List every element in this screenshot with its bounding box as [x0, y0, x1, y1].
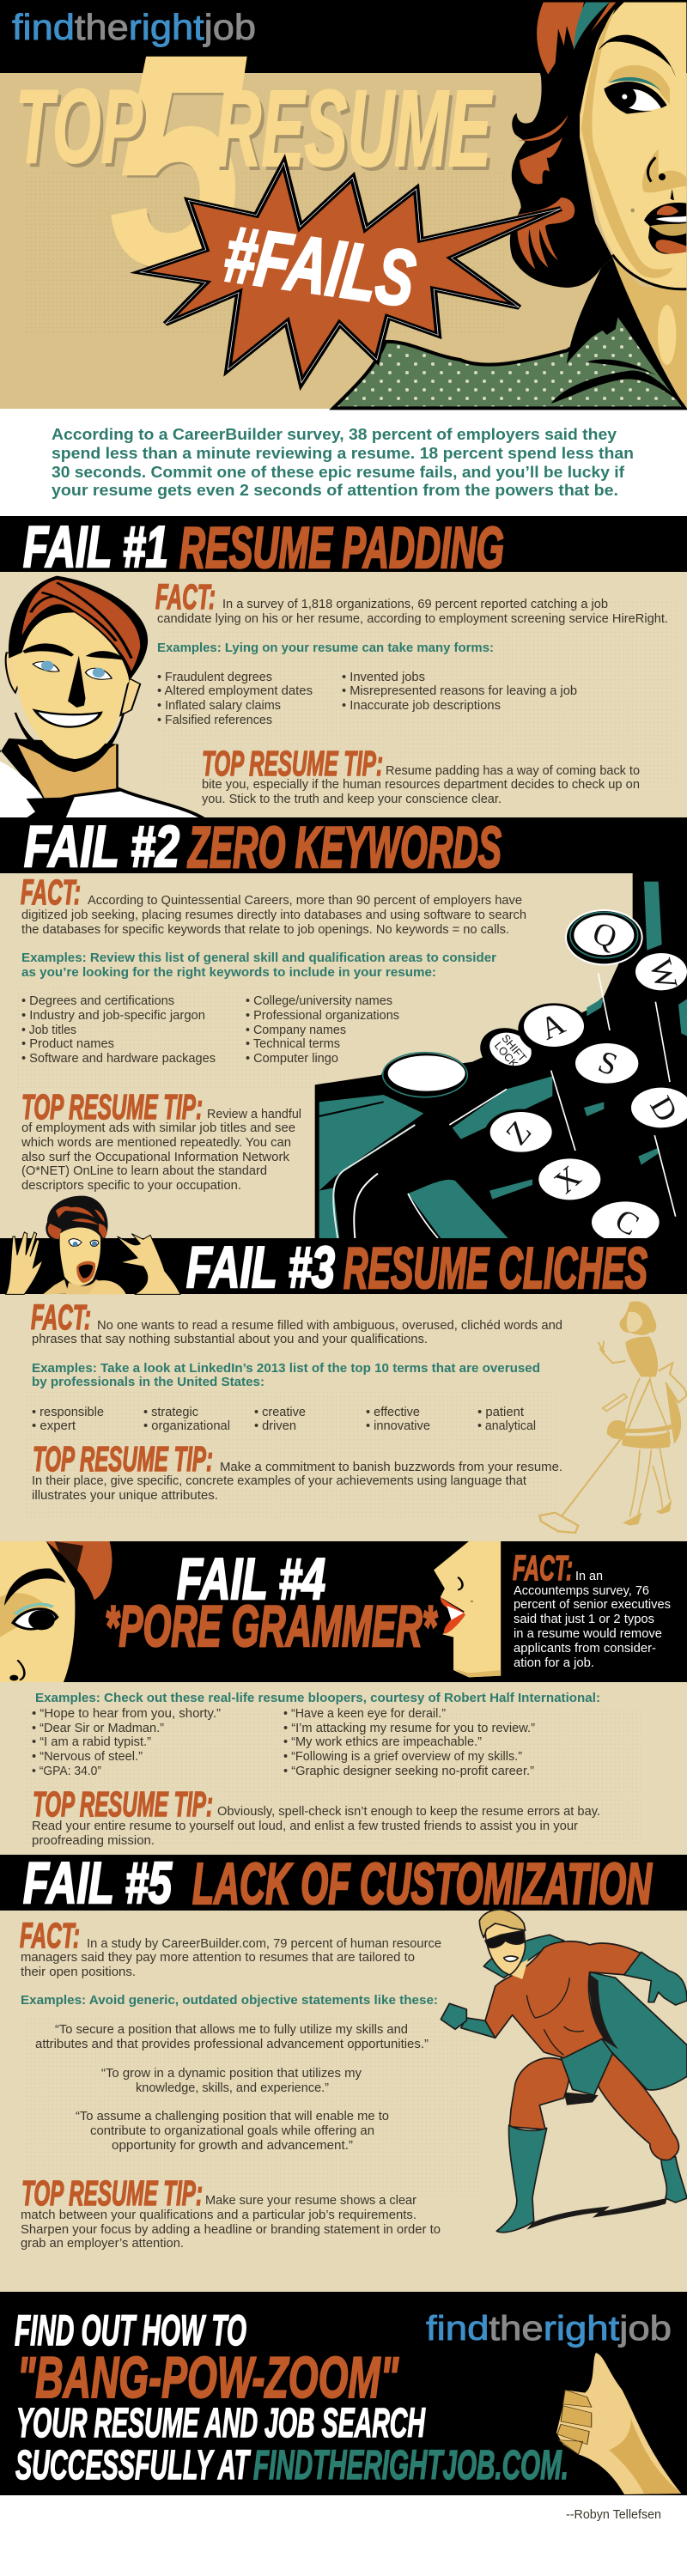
key: S: S: [593, 1043, 623, 1082]
key: shift lock: [473, 1020, 545, 1084]
tip text: [202, 744, 640, 806]
fact text: in a resume would remove: [514, 1626, 662, 1641]
fact text: phrases that say nothing substantial about you and your qualifications.: [32, 1332, 428, 1346]
key: A: [518, 1003, 590, 1054]
intro text: your resume gets even 2 seconds of attention from the powers that be.: [52, 482, 618, 499]
cta heading: "BANG-POW-ZOOM": [17, 2345, 398, 2410]
tip text: which words are mentioned repeatedly. You can: [21, 1135, 291, 1150]
examples list: • Invented jobs: [342, 670, 425, 684]
quotes: [35, 2022, 429, 2153]
fact text: [513, 1548, 671, 1670]
examples heading: Examples: Check out these real-life resume bloopers, courtesy of Robert Half International:: [35, 1691, 600, 1705]
quotes: “To assume a challenging position that will enable me to: [76, 2109, 389, 2123]
examples list: • Inflated salary claims: [157, 698, 281, 713]
fact text: FACT:: [31, 1297, 91, 1337]
quotes: knowledge, skills, and experience.”: [136, 2081, 329, 2095]
examples list: • Altered employment dates: [157, 683, 313, 698]
tip text: TOP RESUME TIP:: [33, 1439, 213, 1479]
logo: findtherightjob: findtherightjob: [12, 7, 256, 47]
tip text: also surf the Occupational Information Network: [21, 1150, 289, 1164]
tip text: illustrates your unique attributes.: [32, 1488, 218, 1503]
examples heading: Examples: Avoid generic, outdated objective statements like these:: [21, 1993, 438, 2008]
key: blank spacebar: [380, 1053, 470, 1105]
fact text: According to Quintessential Careers, more than 90 percent of employers have: [88, 893, 522, 908]
fact text: Accountemps survey, 76: [514, 1583, 649, 1598]
examples list: • Company names: [246, 1023, 346, 1037]
tip text: TOP RESUME TIP:: [33, 1784, 213, 1824]
examples heading: [32, 1361, 540, 1389]
intro text: 30 seconds. Commit one of these epic resume fails, and you’ll be lucky if: [52, 464, 625, 481]
panel: fail 3: [0, 1196, 687, 1541]
illustration: right face: [434, 1541, 501, 1677]
illustration: shocked woman: [6, 1196, 180, 1294]
examples list: • “My work ethics are impeachable.”: [283, 1735, 482, 1749]
logo: findtherightjob: findtheright job: [426, 2310, 672, 2348]
tip text: [32, 1439, 562, 1503]
cta heading: SUCCESSFULLY AT: [15, 2443, 251, 2488]
illustration: typewriter keys: [315, 873, 687, 1252]
fact text: FACT:: [20, 1916, 80, 1955]
heading: fail 4: *PORE GRAMMER*: [105, 1594, 438, 1659]
examples list: • Computer lingo: [246, 1051, 338, 1066]
fact text: candidate lying on his or her resume, according to employment screening service HireRight.: [157, 611, 668, 626]
illustration: woman's face: [333, 3, 686, 408]
title: top resume: [15, 68, 496, 193]
panel: fail 2: [0, 814, 687, 1252]
heading: fail 3: FAIL #3: [186, 1235, 335, 1300]
fact text: FACT:: [155, 577, 216, 617]
cta heading: YOUR RESUME AND JOB SEARCH: [16, 2401, 426, 2446]
intro text: According to a CareerBuilder survey, 38 percent of employers said they: [52, 426, 617, 443]
examples list: • Industry and job-specific jargon: [21, 1008, 205, 1023]
cta heading: FIND OUT HOW TO: [15, 2306, 246, 2354]
tip text: Resume padding has a way of coming back to: [386, 763, 640, 778]
examples list: • analytical: [477, 1419, 536, 1433]
key: Z: Z: [499, 1114, 538, 1151]
cta heading: [15, 2306, 568, 2488]
key: W: [625, 949, 687, 1000]
illustration: superhero: [441, 1910, 687, 2233]
examples list: [157, 670, 577, 727]
fact text: their open positions.: [21, 1965, 136, 1979]
fact text: In an: [575, 1569, 603, 1583]
examples list: • Job titles: [21, 1023, 76, 1037]
heading: fail 1: FAIL #1: [23, 514, 168, 580]
key: A: A: [535, 1005, 570, 1047]
fact text: applicants from consider-: [514, 1641, 656, 1656]
tip text: Review a handful: [207, 1107, 301, 1121]
heading: fail 2: FAIL #2: [24, 814, 179, 879]
examples list: • Fraudulent degrees: [157, 670, 272, 684]
tip text: TOP RESUME TIP:: [202, 744, 383, 783]
fact text: ation for a job.: [514, 1656, 594, 1670]
quotes: opportunity for growth and advancement.”: [112, 2138, 353, 2153]
examples list: • “Graphic designer seeking no-profit career.”: [283, 1764, 534, 1778]
examples list: • responsible: [32, 1405, 104, 1419]
illustration: smiling man: [0, 576, 206, 818]
fact text: In a study by CareerBuilder.com, 79 percent of human resource: [87, 1936, 441, 1951]
heading: fail 4: [105, 1546, 438, 1659]
key: W: W: [643, 955, 684, 993]
examples list: • “GPA: 34.0”: [32, 1764, 101, 1778]
examples list: • College/university names: [246, 993, 392, 1008]
panel: fail 5: [0, 1850, 687, 2292]
key: X: [532, 1155, 607, 1209]
panel: fail 1: [0, 514, 687, 818]
quotes: “To grow in a dynamic position that utilizes my: [101, 2066, 362, 2081]
examples list: • driven: [254, 1419, 296, 1433]
examples list: • Professional organizations: [246, 1008, 399, 1023]
fact text: In a survey of 1,818 organizations, 69 percent reported catching a job: [222, 597, 608, 611]
intro text: [52, 426, 634, 499]
examples list: • Misrepresented reasons for leaving a job: [342, 683, 577, 698]
key: C: C: [610, 1201, 645, 1242]
examples list: • Falsified references: [157, 713, 272, 727]
examples list: • “I’m attacking my resume for you to review.”: [283, 1721, 535, 1735]
fact text: [21, 872, 526, 937]
key: Q: Q: [588, 914, 622, 955]
fact text: the databases for specific keywords that relate to job openings. No keywords = no calls.: [21, 922, 509, 937]
tip text: [32, 1784, 600, 1848]
key: shift lock: LOCK: [492, 1040, 520, 1071]
heading: fail 1: [23, 514, 504, 580]
examples list: • Software and hardware packages: [21, 1051, 216, 1066]
tip text: you. Stick to the truth and keep your conscience clear.: [202, 792, 502, 806]
illustration: thumbs up: [556, 2353, 681, 2494]
tip text: match between your qualifications and a particular job’s requirements.: [21, 2208, 416, 2222]
fact text: percent of senior executives: [514, 1597, 671, 1612]
fact text: [31, 1297, 562, 1346]
intro text: spend less than a minute reviewing a resume. 18 percent spend less than: [52, 445, 634, 462]
fact text: FACT:: [21, 872, 81, 912]
examples list: • innovative: [366, 1419, 430, 1433]
tip text: Make a commitment to banish buzzwords from your resume.: [220, 1460, 562, 1474]
tip text: Make sure your resume shows a clear: [205, 2193, 416, 2208]
title: top resume: TOP: [19, 72, 146, 189]
examples list: • organizational: [143, 1419, 230, 1433]
fact text: No one wants to read a resume filled with ambiguous, overused, clichéd words and: [97, 1318, 562, 1333]
starburst: #fails: #FAILS: [219, 210, 420, 324]
credit: author: --Robyn Tellefsen: [566, 2507, 661, 2522]
examples heading: Examples: Take a look at LinkedIn’s 2013 list of the top 10 terms that are overused: [32, 1361, 540, 1376]
key: shift lock: SHIFT: [499, 1032, 529, 1064]
quotes: contribute to organizational goals while offering an: [90, 2123, 374, 2138]
panel: fail 4: [0, 1541, 687, 1855]
tip text: Obviously, spell-check isn’t enough to keep the resume errors at bay.: [217, 1804, 600, 1819]
fact text: [20, 1916, 441, 1979]
tip text: Sharpen your focus by adding a headline or branding statement in order to: [21, 2222, 441, 2237]
fact text: said that just 1 or 2 typos: [514, 1612, 654, 1626]
examples heading: Examples: Review this list of general skill and qualification areas to consider: [21, 951, 496, 965]
examples list: • Inaccurate job descriptions: [342, 698, 501, 713]
fact text: managers said they pay more attention to resumes that are tailored to: [21, 1950, 415, 1965]
examples list: • “I am a rabid typist.”: [32, 1735, 151, 1749]
illustration: left face: [0, 1541, 112, 1682]
examples heading: by professionals in the United States:: [32, 1375, 264, 1389]
tip text: Read your entire resume to yourself out loud, and enlist a few trusted friends to assist you in your: [32, 1819, 578, 1833]
fact text: [155, 577, 668, 626]
examples heading: Examples: Lying on your resume can take many forms:: [157, 641, 494, 655]
starburst: #fails: [140, 162, 561, 383]
title: top resume: RESUME: [218, 72, 496, 193]
examples heading: as you’re looking for the right keywords to include in your resume:: [21, 965, 436, 980]
tip text: grab an employer’s attention.: [21, 2236, 184, 2251]
examples list: • Degrees and certifications: [21, 993, 174, 1008]
key: C: [586, 1198, 665, 1252]
examples list: [21, 993, 399, 1066]
key: D: [625, 1085, 687, 1136]
heading: fail 2: [24, 814, 502, 880]
tip text: descriptors specific to your occupation.: [21, 1178, 241, 1193]
tip text: proofreading mission.: [32, 1833, 155, 1848]
panel: call to action footer: [0, 2292, 687, 2495]
examples list: [32, 1706, 535, 1778]
examples list: • expert: [32, 1419, 76, 1433]
big number 5: 5: [110, 0, 248, 329]
examples list: • strategic: [143, 1405, 198, 1419]
examples list: • effective: [366, 1405, 420, 1419]
quotes: “To secure a position that allows me to fully utilize my skills and: [55, 2022, 408, 2037]
fact text: FACT:: [513, 1548, 573, 1588]
examples list: • “Following is a grief overview of my skills.”: [283, 1749, 522, 1764]
big number 5: 5: [114, 0, 248, 332]
examples list: • Technical terms: [246, 1036, 340, 1051]
examples list: • “Dear Sir or Madman.”: [32, 1721, 164, 1735]
examples list: • creative: [254, 1405, 306, 1419]
heading: fail 5: [23, 1850, 653, 1917]
heading: fail 5: FAIL #5: [23, 1850, 173, 1916]
tip text: TOP RESUME TIP:: [21, 2173, 203, 2213]
title: top resume: RESUME: [215, 68, 493, 189]
examples list: [32, 1405, 536, 1433]
tip text: In their place, give specific, concrete examples of your achievements using language that: [32, 1473, 527, 1488]
heading: fail 3: [186, 1235, 647, 1301]
key: S: [570, 1041, 643, 1091]
key: Z: [484, 1109, 557, 1161]
tip text: [21, 2173, 441, 2251]
examples list: • Product names: [21, 1036, 114, 1051]
key: D: D: [643, 1091, 685, 1127]
examples list: • “Have a keen eye for derail.”: [283, 1706, 446, 1721]
tip text: of employment ads with similar job titles and see: [21, 1121, 295, 1135]
key: X: X: [547, 1158, 587, 1200]
tip text: (O*NET) OnLine to learn about the standard: [21, 1163, 267, 1178]
examples list: • “Nervous of steel.”: [32, 1749, 143, 1764]
tip text: [21, 1087, 301, 1193]
tip text: bite you, especially if the human resources department decides to check up on: [202, 777, 640, 792]
title: top resume: TOP: [15, 68, 143, 185]
key: Q: [565, 909, 643, 965]
examples heading: [21, 951, 496, 980]
panel: hero header: [0, 0, 687, 409]
examples list: • patient: [477, 1405, 525, 1419]
tip text: TOP RESUME TIP:: [21, 1087, 203, 1127]
heading: fail 4: FAIL #4: [177, 1546, 325, 1612]
quotes: attributes and that provides professional advancement opportunities.”: [35, 2037, 429, 2051]
examples list: • “Hope to hear from you, shorty.”: [32, 1706, 221, 1721]
fact text: digitized job seeking, placing resumes directly into databases and using software to search: [21, 908, 526, 922]
illustration: maid with mop: [539, 1302, 687, 1533]
